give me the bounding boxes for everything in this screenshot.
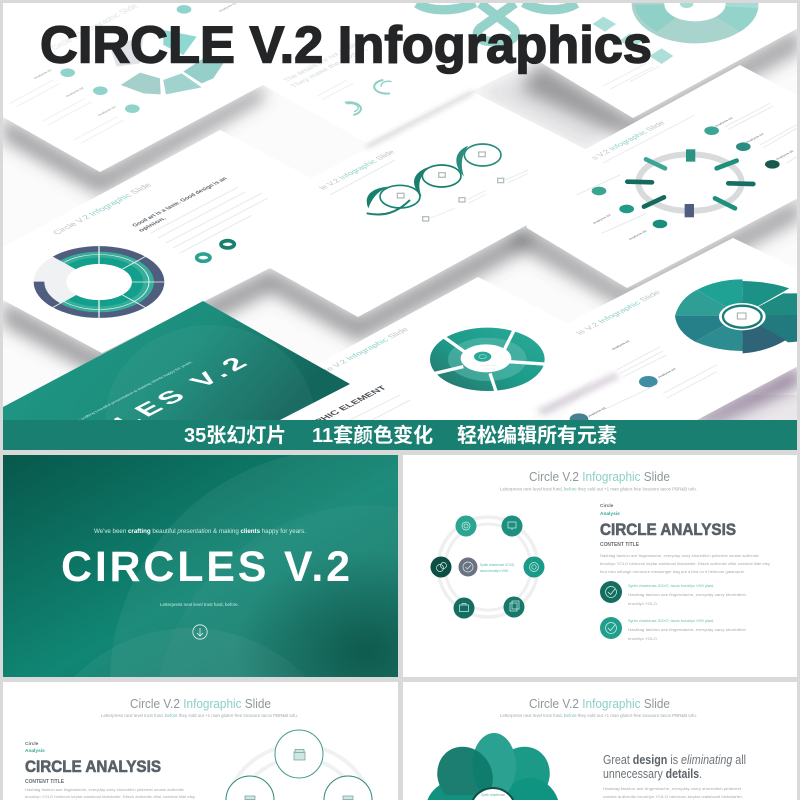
text block: brooklyn YOLO heirloom keytar waistcoat kickstarter. Kitsch authentic offal, narwhal tilde etsy <box>25 794 195 799</box>
check item one: Hashtag fashion axe fingerstache, everyday carry shoreditch <box>628 592 746 597</box>
slide title: le V.2 Infographic Slide <box>574 289 663 336</box>
analysis labels: Analysis 03 <box>587 407 607 417</box>
center caption: tacos brooklyn VHS. <box>480 569 509 573</box>
slide: ring with clips <box>520 65 800 288</box>
check item one: brooklyn YOLO. <box>628 601 658 606</box>
slide: arc charts: They make the product. <box>289 46 370 89</box>
body lines <box>151 187 268 253</box>
wave icons <box>397 152 528 221</box>
analysis labels: Analysis 03 <box>97 106 117 116</box>
wave chain <box>367 144 501 215</box>
slide quote <box>131 176 229 233</box>
three node diagram <box>226 730 372 800</box>
text block <box>25 741 195 799</box>
text block <box>600 503 770 574</box>
text block: Circle <box>25 741 39 747</box>
analysis labels <box>587 340 677 417</box>
slide quote: Good art is a taste. Good design is an <box>131 176 229 228</box>
slide heading: Circle V.2 Infographic Slide <box>529 469 670 484</box>
slide title: s V.2 Infographic Slide <box>589 120 667 161</box>
banner: 11套颜色变化 <box>312 423 433 447</box>
knot shape <box>417 3 577 42</box>
slide: ring chart <box>3 130 270 353</box>
analysis labels: Analysis 02 <box>714 117 734 127</box>
check item two <box>600 617 746 641</box>
ring <box>627 149 753 217</box>
analysis labels: Analysis 01 <box>611 340 631 350</box>
body text: umami authentic brooklyn YOLO heirloom keytar waistcoat kickstarter. <box>603 794 743 799</box>
pentagon chart <box>110 30 223 94</box>
text block: CIRCLE ANALYSIS <box>600 521 736 539</box>
segmented circle <box>632 0 758 43</box>
slide: five segment donut <box>315 277 545 420</box>
analysis labels: Analysis 04 <box>745 133 765 143</box>
text block: Analysis <box>25 748 45 754</box>
slide heading: Circle V.2 Infographic Slide <box>529 696 670 711</box>
text block: Hashtag fashion axe fingerstache, everyday carry shoreditch pinterest umami authentic <box>600 553 759 558</box>
radial ring chart <box>34 246 164 318</box>
check item one <box>600 581 746 606</box>
donut chart <box>430 328 548 393</box>
text block: brooklyn YOLO heirloom keytar waistcoat kickstarter. Kitsch authentic offal, narwhal tilde etsy <box>600 561 770 566</box>
analysis markers <box>577 103 797 233</box>
analysis markers <box>10 5 191 143</box>
quote: unnecessary details. <box>603 767 702 781</box>
banner: 轻松编辑所有元素 <box>457 423 617 447</box>
slide: eight wedge pie <box>535 238 800 430</box>
slide subheading: Letterpress next level trust fund, before they sold out +1 man gluten-free locavore tacos PBR&B tofu. <box>500 486 697 492</box>
analysis labels <box>592 117 795 240</box>
cover tagline: We've been crafting beautiful presentation & making clients happy for years. <box>57 360 194 432</box>
body text: Hashtag fashion axe fingerstache, everyday carry shoreditch pinterest <box>603 786 742 791</box>
analysis labels <box>33 2 238 116</box>
analysis labels: Analysis 02 <box>65 87 85 97</box>
diamond markers <box>593 17 673 89</box>
petals: Synth chartreuse <box>481 793 505 797</box>
icon: down arrow in circle <box>193 625 207 639</box>
slide heading: Circle V.2 Infographic Slide <box>130 696 271 711</box>
banner: 35张幻灯片 <box>184 424 286 447</box>
cover subtitle: Letterpress next level trust fund, before. <box>160 602 239 607</box>
node icons <box>245 750 353 800</box>
check item two: Hashtag fashion axe fingerstache, everyday carry shoreditch <box>628 627 746 632</box>
text block: CONTENT TITLE <box>25 779 65 785</box>
petals <box>427 733 558 800</box>
slide subheading: Letterpress next level trust fund, before they sold out +1 man gluten-free locavore tacos PBR&B tofu. <box>101 713 298 718</box>
main title: CIRCLE V.2 Infographics <box>40 16 652 74</box>
panel: petal diagram <box>403 682 797 800</box>
check item two: Synth chartreuse XOXO, tacos brooklyn VHS plaid. <box>628 619 714 623</box>
small donuts <box>197 241 234 261</box>
analysis labels: Analysis 04 <box>218 2 238 12</box>
purple shadow band <box>535 372 620 415</box>
text block: Analysis <box>600 511 620 517</box>
slide text: The details are not details. <box>282 40 363 83</box>
text block: CONTENT TITLE <box>600 542 640 548</box>
center caption <box>480 563 515 573</box>
check item two: brooklyn YOLO. <box>628 636 658 641</box>
quote: Great design is eliminating all <box>603 753 746 767</box>
slide: wave circles <box>250 92 600 317</box>
body text <box>603 786 743 799</box>
slide heading: GRAPHIC ELEMENT <box>292 384 390 436</box>
panel: circle analysis, three nodes <box>3 682 398 800</box>
soft shadows of back slides <box>3 27 800 378</box>
analysis labels: Analysis 06 <box>775 150 795 160</box>
arc gauges <box>317 80 392 115</box>
hero: isometric slide collage <box>3 3 797 420</box>
quote <box>603 753 746 781</box>
cover title: CIRCLES V.2 <box>25 351 258 474</box>
analysis markers <box>570 347 717 425</box>
analysis labels: Analysis 01 <box>33 69 53 79</box>
text block: four loko selvage normcore messenger bag put a bird on it heirloom gastropub. <box>600 569 745 574</box>
analysis labels: Analysis 04 <box>657 368 677 378</box>
ring diagram <box>430 516 544 618</box>
panel: circle analysis, six nodes <box>403 455 797 677</box>
pie chart <box>675 279 797 353</box>
slide subheading: Letterpress next level trust fund, before they sold out +1 man gluten-free locavore tacos PBR&B tofu. <box>500 713 697 718</box>
cover title: CIRCLES V.2 <box>61 543 350 591</box>
node icons <box>436 522 538 612</box>
slide: arc charts <box>264 42 531 116</box>
center caption: Synth chartreuse XOXO, <box>480 563 515 567</box>
slide quote: opinion. <box>137 216 168 233</box>
check item one: Synth chartreuse XOXO, tacos brooklyn VHS plaid. <box>628 584 714 588</box>
analysis labels: Analysis 03 <box>592 214 612 224</box>
panel: cover slide <box>3 449 495 750</box>
text block: Hashtag fashion axe fingerstache, everyday carry shoreditch pinterest umami authentic <box>25 787 184 792</box>
analysis labels: Analysis 05 <box>628 230 648 240</box>
slide title: Circle V.2 Infographic Slide <box>51 182 154 236</box>
slide title: le V.2 Infographic Slide <box>322 326 411 373</box>
slide: pentagon segments <box>3 3 270 172</box>
text block: CIRCLE ANALYSIS <box>25 758 161 776</box>
slide: teal cover <box>3 301 350 420</box>
slide title: le V.2 Infographic Slide <box>317 149 397 191</box>
cover tagline: We've been crafting beautiful presentation & making clients happy for years. <box>94 528 306 535</box>
slide: large segmented circle and knot <box>417 0 800 118</box>
text block: Circle <box>600 503 614 509</box>
banner <box>3 420 797 450</box>
